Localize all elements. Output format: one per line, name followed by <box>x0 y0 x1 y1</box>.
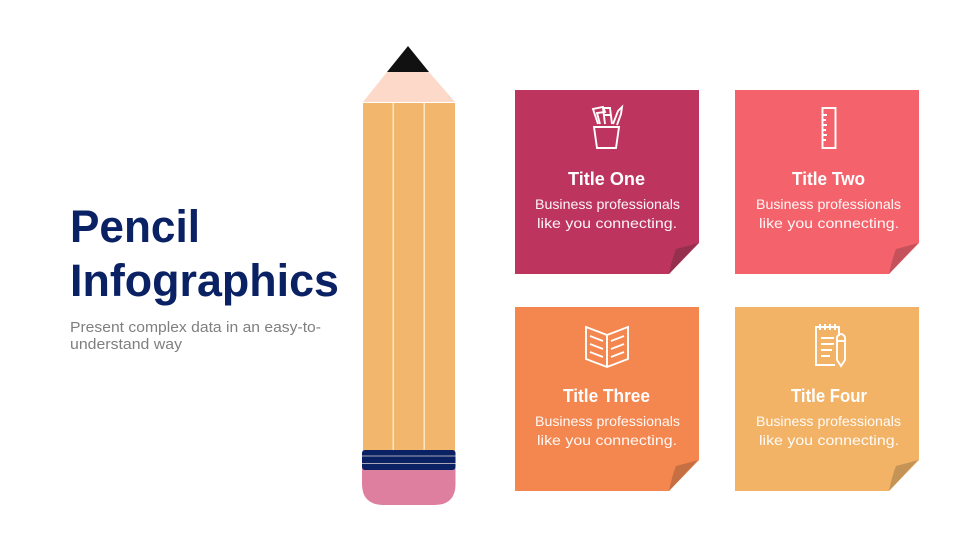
page fold <box>669 243 698 274</box>
card title: Title Two <box>792 169 865 189</box>
page fold <box>889 460 918 491</box>
title: Pencil <box>70 201 200 252</box>
card text <box>756 413 901 448</box>
card title: Title Four <box>791 386 867 406</box>
card background <box>515 307 699 491</box>
subtitle <box>70 319 321 353</box>
card background <box>515 90 699 274</box>
title <box>70 201 339 306</box>
heading block <box>70 201 339 353</box>
card text <box>535 196 680 231</box>
subtitle: understand way <box>70 336 183 353</box>
card title: Title One <box>568 169 645 189</box>
pencil wood cone <box>363 72 455 102</box>
card text <box>756 196 901 231</box>
panel: title four <box>735 307 919 491</box>
icon: notepad and pencil <box>816 324 845 366</box>
card text <box>535 413 680 448</box>
card text: Business professionals <box>535 413 680 429</box>
card text: like you connecting. <box>537 432 677 448</box>
pencil eraser <box>362 468 456 505</box>
panel: title three <box>515 307 699 491</box>
card text: Business professionals <box>535 196 680 212</box>
pencil ferrule band <box>362 450 456 470</box>
panel: title one <box>515 90 699 274</box>
pencil graphite tip <box>387 46 429 72</box>
title: Infographics <box>70 255 339 306</box>
page fold <box>669 460 698 491</box>
panel: title two <box>735 90 919 274</box>
card text: like you connecting. <box>537 215 677 231</box>
subtitle: Present complex data in an easy-to- <box>70 319 321 336</box>
icon: ruler <box>822 108 836 148</box>
pencil body <box>363 103 455 451</box>
card text: like you connecting. <box>759 432 899 448</box>
card text: like you connecting. <box>759 215 899 231</box>
pencil illustration <box>362 46 456 505</box>
page fold <box>889 243 918 274</box>
card text: Business professionals <box>756 413 901 429</box>
icon: open book <box>586 327 628 367</box>
card background <box>735 307 919 491</box>
card title: Title Three <box>563 386 650 406</box>
icon: pencil cup <box>593 107 622 148</box>
card background <box>735 90 919 274</box>
card text: Business professionals <box>756 196 901 212</box>
